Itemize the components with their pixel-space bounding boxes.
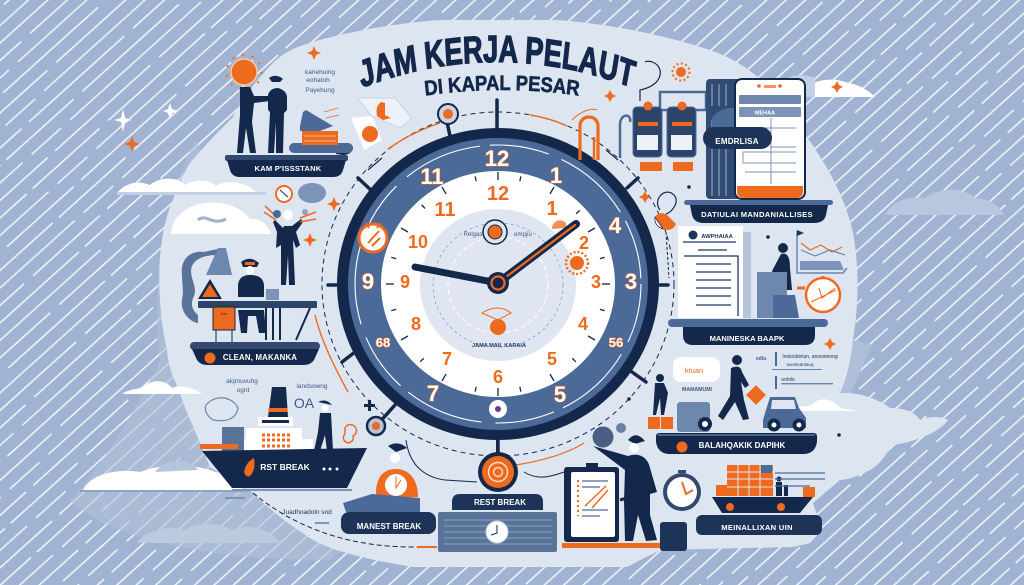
cart [677,402,712,432]
manest break figure [343,443,420,512]
cargo ship [712,465,825,513]
inner numerals: 2 [579,233,589,253]
small captions bottom-left: alqmuvuhg [226,378,258,385]
caption: eohatoh [306,77,330,84]
file stack [706,79,750,199]
label: REST BREAK [452,494,543,510]
truck [763,397,806,432]
notes block: wunsvantsuq [787,362,814,367]
cruise ship: RST BREAK [260,462,311,472]
inner numerals: 11 [434,199,456,221]
rest break node [478,440,518,492]
inner numerals: 10 [408,232,428,252]
small captions bottom-left: ognt [237,387,250,394]
small captions bottom-left: landsowng [296,383,328,390]
clouds [80,75,1004,543]
clock [328,100,668,452]
label bar: DATIULAI MANDANIALLISES: DATIULAI MANDANIALLISES [701,210,813,219]
notes block: oohilo [781,377,795,383]
inner numerals: 8 [411,314,421,334]
inner numerals [400,183,601,387]
outer numerals: 7 [427,381,439,406]
crew group top-left [226,54,353,153]
clock hands [415,224,576,294]
inner pale circle [420,209,576,361]
hull [202,448,367,488]
hook wire [640,61,660,101]
clipboard [564,463,619,542]
machines panel [620,92,706,171]
phone panel [735,79,805,199]
soft shadow band left [70,140,400,560]
title: JAM KERJA PELAUT [360,35,638,87]
arrow small [368,150,618,170]
small captions bottom-left [225,378,332,524]
small worker [648,374,673,429]
outer numerals: 5 [554,382,566,407]
machine 2 [667,102,696,171]
rest break device [438,512,557,552]
phone panel: MEHAA [755,110,775,116]
chart [797,230,847,273]
orange ornament [343,425,356,443]
dial ticks [386,172,610,396]
label: MANEST BREAK [341,512,436,534]
label: MEINALLIXAN UIN: MEINALLIXAN UIN [721,523,793,532]
caption [305,69,335,94]
label: MEINALLIXAN UIN [696,515,822,535]
inner numerals: 3 [591,272,601,292]
notes block: Instosbinlun, anoownong [782,354,838,360]
desk scene [182,248,317,342]
top-left node [438,104,458,124]
people [776,476,788,496]
figure tall [237,87,270,153]
headset shape [182,248,232,323]
hull [712,497,813,513]
outer numerals: 68 [376,335,390,350]
icon: stone outline [205,398,238,421]
figure arms raised [264,206,316,285]
icon: sun [226,54,262,90]
icon: stopwatch on dial [359,223,387,252]
notes block [756,352,838,389]
person at lectern [757,243,799,318]
clock stubs [328,100,668,452]
centre top badge [464,220,532,244]
small captions bottom-left: OA [294,395,315,411]
document panel: AWPHAIAA [701,234,734,240]
text bubble [673,357,720,393]
documents near title [336,98,412,155]
icon: stopwatch right [797,276,840,312]
text bubble: ktuan [685,366,703,375]
funnel [268,387,288,417]
label bar: BALAHQAKIK DAPIHK [656,433,817,454]
centre top badge: Relgas [464,232,482,238]
outer numerals: 1 [550,163,562,188]
outer numerals: 12 [485,146,509,171]
title: DI KAPAL PESAR [424,75,580,96]
inner numerals: 12 [487,183,509,205]
icon: clock gauge [663,470,701,511]
centre lower emblem: JAMA MAIL KARAIA [472,343,526,349]
label bar: CLEAN, MAKANKA [190,342,320,365]
label: EMDRLISA: EMDRLISA [715,137,759,146]
icon: gauge and globe [276,183,326,203]
rim [337,128,659,440]
label bar: CLEAN, MAKANKA: CLEAN, MAKANKA [223,353,297,362]
label: MANEST BREAK: MANEST BREAK [357,522,421,531]
icon: stacked books [289,108,353,153]
centre lower emblem [472,308,526,349]
superstructure [238,417,313,451]
outer numerals [362,146,637,407]
inspector figure [562,423,687,551]
warning triangle [198,279,222,299]
workers and cart [648,355,806,432]
soft shadow band right [838,340,872,395]
label bar: MANINESKA BAAPK [668,319,828,345]
label bar: DATIULAI MANDANIALLISES [684,200,833,223]
crew [314,401,333,451]
notes block: sdlu [756,356,766,362]
label: EMDRLISA [703,127,772,149]
icon: orange paperclip [572,109,598,160]
seated officer [238,259,266,333]
document panel [678,226,751,318]
label bar: KAM P'ISSSTANK: KAM P'ISSSTANK [255,164,322,173]
dial bottom dot [489,400,507,418]
small captions bottom-left: Juadhoadoln snd [282,509,332,516]
outer numerals: 4 [609,213,622,238]
label: REST BREAK: REST BREAK [474,498,526,507]
icon: small sun top right [672,64,690,80]
inner numerals: 1 [546,198,558,220]
central pale blob [159,20,948,567]
bottom-left node [367,417,385,435]
caption: Payehung [305,87,335,94]
containers [716,465,773,496]
inner numerals: 7 [442,349,452,369]
machine 1 [633,102,662,171]
label bar: MANINESKA BAAPK: MANINESKA BAAPK [710,334,785,343]
outer numerals: 11 [420,164,444,189]
icon: sun on dial [552,220,588,274]
label bar: BALAHQAKIK DAPIHK: BALAHQAKIK DAPIHK [699,441,786,450]
inner numerals: 6 [493,367,503,387]
sparkles [114,46,843,437]
outer numerals: 56 [609,335,623,350]
orbit dashes and arcs [253,112,674,547]
caption: kanehuing [305,69,335,76]
centre top badge: empjiu [514,232,532,238]
inner numerals: 4 [578,314,588,334]
cruise ship [200,387,367,491]
outer numerals: 9 [362,269,374,294]
inner numerals: 5 [547,349,557,369]
blue ring [348,138,648,430]
orange box: Dnf [221,311,228,316]
white dial [381,171,615,397]
figure short [268,76,287,153]
walking worker [718,355,766,420]
outer numerals: 3 [625,269,637,294]
inner numerals: 9 [400,272,410,292]
icon: pendant lamp [655,192,676,278]
desk [198,301,317,308]
label bar: KAM P'ISSSTANK [225,155,348,177]
text bubble: MAMAMUMI [682,387,713,393]
